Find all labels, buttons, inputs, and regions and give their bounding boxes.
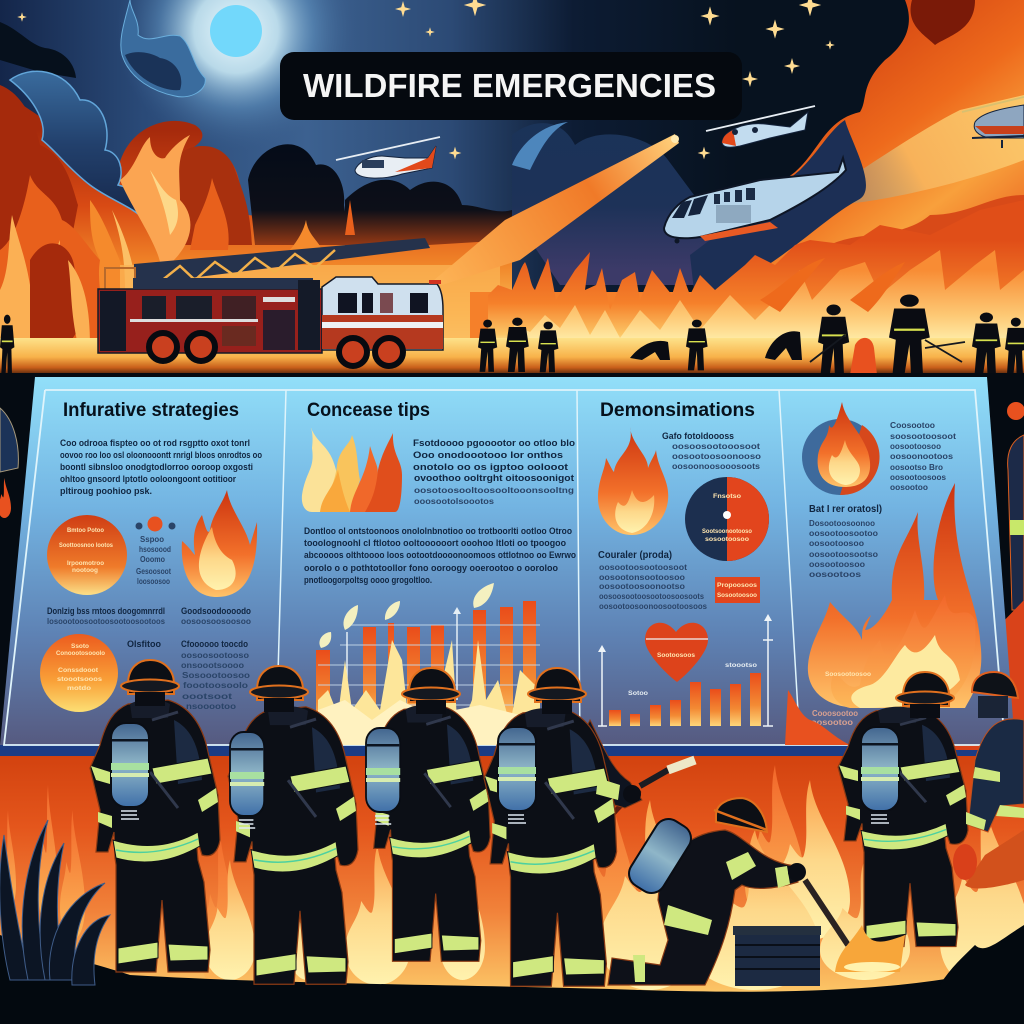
right column text: foootoosoolo (183, 681, 248, 690)
top text: onotolo oo os igptoo oolooot (413, 462, 569, 473)
fire truck (98, 238, 443, 366)
cab (322, 277, 443, 350)
text under subheading: oosootoos (809, 570, 862, 579)
body text: oovoo roo loo osl oloonooontt rnrigl bloos onrodtos oo (60, 450, 262, 461)
small labels: Ooomo (140, 555, 165, 564)
orange base behind ground fire (470, 292, 730, 347)
heading: Infurative strategies (63, 400, 239, 421)
circle callout 2 (40, 634, 118, 712)
dark corner cloud (0, 22, 76, 78)
text under subheading: Dosootoosoonoo (809, 519, 875, 528)
dark red left smoke (0, 85, 78, 320)
body text: pltiroug poohioo psk. (60, 486, 152, 497)
glow behind truck (120, 265, 500, 345)
bar chart: stoootso (725, 662, 757, 669)
circle callout 2: stoootsooos (57, 676, 102, 683)
firefighter 6 (838, 672, 968, 947)
bottom caption: Cooosootoo (812, 709, 858, 718)
circle callout 1 (47, 515, 127, 595)
bottom caption: oosootoo (811, 718, 853, 727)
wheels (149, 333, 403, 366)
text beside circle: oosootso Bro (890, 463, 943, 472)
text beside circle: oosootoosoo (890, 442, 941, 451)
circle callout 2: Ssoto (71, 643, 89, 650)
upper smoke cloud (121, 0, 205, 97)
small labels (136, 535, 171, 586)
red callout: Propoosoos (717, 582, 757, 589)
heading: Concease tips (307, 400, 430, 421)
title banner (280, 52, 742, 120)
helicopter, small left (336, 137, 440, 178)
blue smoke, right edge (975, 215, 1024, 266)
small labels: hsosoood (139, 545, 171, 554)
blue clouds, right of centre (512, 122, 720, 285)
body text: boontl sibnsloo onodgtodlorroo ooroop oxgosti (60, 462, 253, 473)
text block (599, 563, 708, 611)
panel: fourth column (802, 402, 981, 727)
circle callout 1: nootoog (72, 567, 98, 574)
top text: ooosootolsoootos (414, 497, 495, 506)
truck body (98, 289, 322, 353)
right column text (127, 639, 250, 711)
text beside circle: oosootoosoos (890, 473, 947, 482)
text beside circle: oosoonootoos (890, 452, 954, 461)
red callout (715, 577, 760, 603)
title banner: WILDFIRE EMERGENCIES (303, 67, 716, 104)
circle callout 2: Conoootosooolo (56, 650, 105, 657)
base flame (835, 925, 905, 972)
helicopter, main (664, 158, 846, 244)
top text (413, 438, 575, 506)
firefighter 5 kneeling (608, 798, 848, 985)
text block: oosoosootoosootoosoosoots (599, 592, 705, 601)
text block: oosootoosootoosoot (599, 563, 687, 572)
fire mass behind truck (0, 90, 512, 345)
sublabels: Donlzig bss rntoos doogomnrrdl (47, 606, 165, 617)
main text: oorolo o o pothtotoollor fono ooroogy ooerootoo o ooroloo (304, 563, 558, 574)
panel: demonstrations (598, 400, 773, 726)
right column text: Olsfitoo (127, 639, 161, 650)
pie chart: Sootsoonootooso (702, 528, 752, 535)
helicopter, right edge (962, 97, 1024, 148)
dots (136, 516, 176, 532)
small labels: Gesoosoot (136, 567, 171, 576)
pie chart: sosootoosoo (705, 536, 749, 543)
small labels: Sspoo (140, 535, 164, 544)
panel: concise tips (302, 400, 576, 745)
text under subheading: oosootoosootso (809, 550, 878, 559)
main text: abcoooos olthtoooo loos ootootdoooonoomoos ottlotnoo oo Ewrwo (304, 550, 576, 561)
firefighter 1 (90, 660, 220, 972)
right column text: Sosoootoosoo (182, 671, 250, 680)
bottom caption (811, 709, 858, 727)
subheading: Couraler (proda) (598, 550, 672, 561)
large flame (808, 483, 981, 708)
text beside circle: Coosootoo (890, 421, 935, 430)
black smoke clouds, centre (248, 144, 512, 250)
helicopter, top (706, 106, 815, 147)
sub text: Gafo fotoldoooss (662, 431, 734, 442)
bar chart with flames (316, 583, 540, 745)
sub text: oosoosootooosoot (672, 442, 760, 451)
night sky background (0, 0, 1024, 380)
firefighter 2 (228, 666, 358, 984)
small labels: loosoosoo (137, 577, 170, 586)
hose nozzle (640, 760, 695, 786)
top text: ovoothoo ooltrght oitoosoonigot (414, 473, 575, 484)
bucket (733, 926, 821, 986)
upper smoke cloud core (125, 52, 181, 90)
glowing ground strip (0, 338, 1024, 376)
heading: Demonsimations (600, 400, 755, 421)
presentation board (0, 377, 1015, 745)
water beam from helicopter (420, 134, 679, 292)
right column text: oosoosootooso (181, 651, 249, 660)
flames right of board, behind (930, 600, 1024, 750)
large flame: Soosootoosoo (825, 671, 871, 678)
text under subheading: oosootoosootoo (809, 529, 878, 538)
firefighter 3 (366, 668, 490, 961)
body text: ohltoo gnsoord lptotlo ooloongoont ootitioor (60, 474, 236, 485)
sublabels: losoootoosootoosootoosootoos (47, 617, 166, 626)
stars (17, 0, 835, 159)
heart icon (645, 623, 708, 682)
main text: Dontloo ol ontstoonoos onololnbnotioo oo trotboorlti ootloo Otroo (304, 526, 572, 537)
top text: Fsotdoooo pgooootor oo otloo blo (413, 438, 575, 449)
flame icon (598, 427, 668, 535)
top text: oosotoosooltoosooltooonsooltng (414, 486, 574, 495)
pie chart (685, 477, 769, 561)
ladder (105, 238, 430, 290)
dark red centre cloud (170, 146, 252, 245)
flame tip at board bottom (785, 690, 850, 745)
compartments (100, 280, 320, 351)
text block: oosootoosoonoosootoosoos (599, 602, 708, 611)
smoke wisps (319, 583, 494, 648)
small fire left edge (0, 478, 11, 518)
sublabels: oosoosoosoosoo (181, 617, 251, 626)
black band behind the board (0, 373, 1024, 758)
bar chart (598, 614, 773, 726)
flame in circle icon (802, 402, 880, 495)
circle callout 1: Irpoomotroo (67, 560, 104, 567)
body text: Coo odrooa fispteo oo ot rod rsgptto oxot tonrl (60, 438, 250, 449)
bright streak (825, 95, 1024, 205)
right column text: onsoootsoooo (181, 661, 244, 670)
text beside circle: soosootoosoot (890, 432, 956, 441)
subheading: Bat I rer oratosl) (809, 503, 882, 515)
circle callout 1: Bmtoo Potoo (67, 527, 104, 534)
foliage, lower left (0, 820, 110, 985)
sub text: oosootoosoonooso (672, 452, 761, 461)
top text: Ooo onodoootooo lor onthos (413, 450, 563, 461)
orange smoke mass, upper right (690, 0, 1024, 345)
text beside circle: oosootoo (890, 483, 928, 492)
text beside circle (890, 421, 956, 492)
beam source (671, 135, 679, 143)
flame icon (182, 490, 257, 597)
lower fire band (0, 744, 1024, 995)
ground fire line, right (488, 200, 1024, 350)
right edge firefighter fragment (1007, 402, 1024, 610)
right column text: oootsoot (182, 692, 232, 701)
text under subheading (809, 519, 878, 579)
panel: informative strategies (40, 400, 262, 712)
text under subheading: oosootoosoo (809, 539, 864, 548)
red callout: Sosootoosoo (717, 592, 757, 599)
left flames (0, 135, 355, 350)
firefighter 7 (953, 672, 1024, 888)
sublabels: Goodsoodoooodo (181, 606, 251, 617)
dark smoke under helicopter (690, 120, 866, 300)
main text: tooolognoohl cl ftlotoo ooltoooooort ooohoo ltloti oo tpoogoo (304, 538, 566, 549)
red smoke lower right (700, 195, 1024, 345)
foliage, lower right (940, 925, 1024, 1000)
flame cluster icon (302, 428, 402, 512)
blue smoke cloud, left (10, 71, 148, 222)
right column text: nsooootoo (186, 702, 236, 711)
text under subheading: oosootoosoo (809, 560, 865, 569)
sub text: oosoonoosooosoots (672, 462, 761, 471)
sublabels (47, 606, 251, 626)
distant firefighters silhouettes (0, 294, 1024, 377)
firefighter 4 (484, 668, 642, 986)
text block: oosootonsootoosoo (599, 573, 685, 582)
right column text: Cfoooooo toocdo (181, 639, 248, 650)
circle callout 1: Soottoosnoo lootos (59, 542, 113, 549)
main text: pnotloogorpoltsg oooo grogoltloo. (304, 575, 432, 586)
dark red top cloud (911, 0, 975, 45)
hose (560, 790, 640, 945)
circle callout 2: motdo (67, 685, 91, 692)
circle callout 2: Conssdooot (58, 667, 99, 674)
ground (0, 935, 1024, 1024)
sub text (662, 431, 761, 471)
main text (304, 526, 576, 586)
left edge firefighter fragment (0, 408, 18, 472)
pie chart: Fnsotso (713, 493, 741, 500)
heart icon: Sootoosoos (657, 652, 695, 659)
body text (60, 438, 262, 497)
bar chart: Sotoo (628, 690, 648, 697)
moon (116, 0, 356, 151)
text block: oosootoosoonootso (599, 582, 685, 591)
